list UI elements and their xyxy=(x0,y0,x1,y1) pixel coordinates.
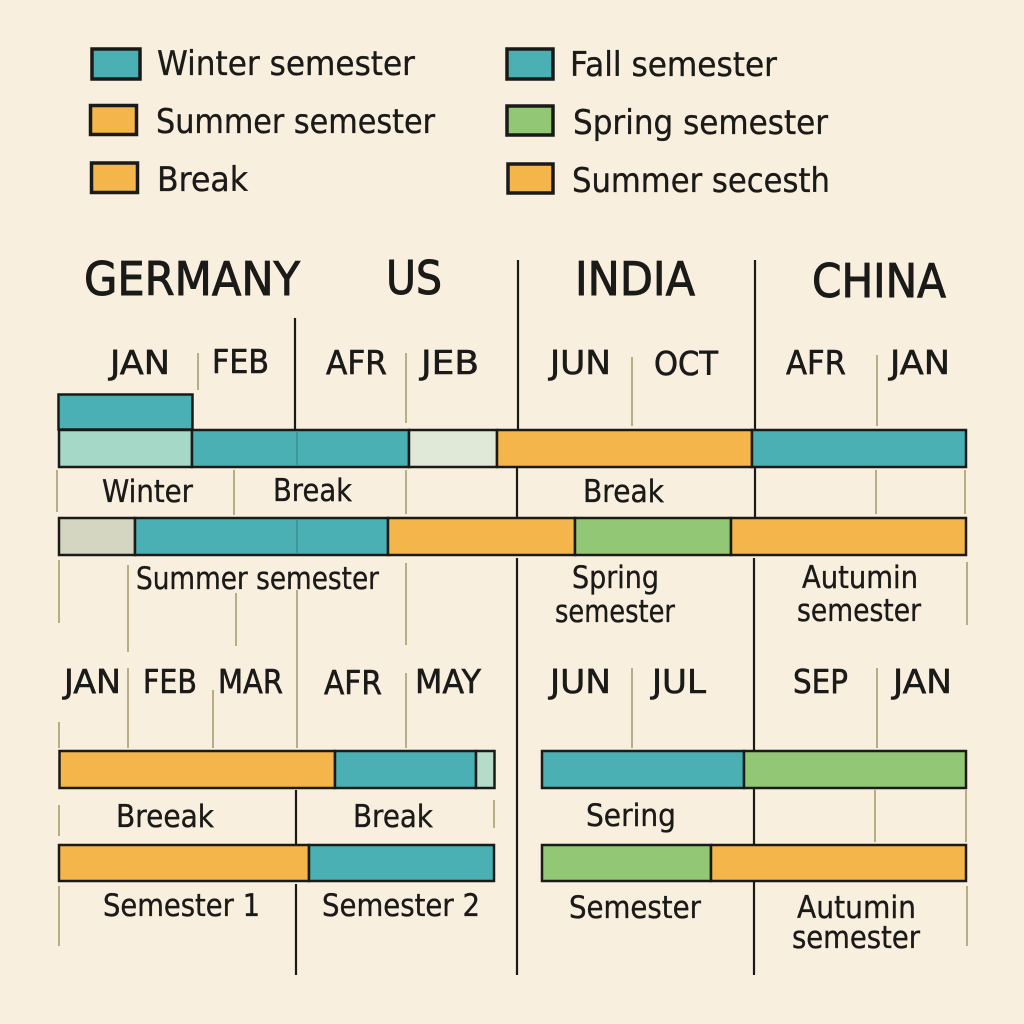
lower left bar 2 xyxy=(59,845,494,881)
legend: summer semester: Summer semester xyxy=(156,102,435,142)
lower month labels: FEB xyxy=(143,662,197,701)
lower month labels xyxy=(62,662,952,702)
upper month labels xyxy=(108,342,950,383)
upper month labels: AFR xyxy=(786,343,846,382)
upper row labels 2: Autumin xyxy=(802,560,918,596)
upper row labels 1 xyxy=(102,473,664,510)
upper month labels: JAN xyxy=(888,343,950,382)
lower row labels 1: Breeak xyxy=(116,799,214,835)
upper row labels 2 xyxy=(136,560,921,630)
lower month labels: JUL xyxy=(650,662,707,701)
upper timeline bar 1 xyxy=(59,430,966,467)
lower row labels 1: Sering xyxy=(586,798,676,834)
lower row labels 2: Semester xyxy=(569,890,701,926)
upper month labels: AFR xyxy=(326,343,387,382)
lower row labels 2: Semester 1 xyxy=(103,888,260,924)
lower month labels: JUN xyxy=(548,662,611,701)
lower month labels: SEP xyxy=(793,662,848,701)
lower month labels: JAN xyxy=(891,662,952,701)
upper row labels 2: semester xyxy=(797,593,921,629)
upper month labels: JEB xyxy=(419,343,479,382)
upper row labels 2: Spring xyxy=(572,560,659,596)
legend: break: Break xyxy=(157,160,248,200)
lower month labels: AFR xyxy=(324,663,382,702)
upper month labels: JUN xyxy=(548,343,611,382)
upper month labels: FEB xyxy=(212,342,269,381)
lower row labels 1: Break xyxy=(353,799,433,835)
lower row labels 2: semester xyxy=(792,920,920,956)
upper month labels: OCT xyxy=(654,344,719,383)
lower row labels 2: Autumin xyxy=(797,890,916,926)
grid lines xyxy=(57,260,967,975)
column headings: US xyxy=(386,251,442,305)
legend: summer secesth: Summer secesth xyxy=(572,161,830,201)
legend: winter semester: Winter semester xyxy=(157,44,415,84)
upper month labels: JAN xyxy=(108,343,170,382)
lower right bar 2 xyxy=(542,845,966,881)
lower row labels 1 xyxy=(116,798,676,835)
upper timeline bar 0 xyxy=(58,394,192,430)
upper row labels 2: semester xyxy=(555,594,675,630)
lower right bar 1 xyxy=(542,751,966,788)
column headings: INDIA xyxy=(575,252,695,306)
upper row labels 1: Break xyxy=(583,474,664,510)
lower left bar 1 xyxy=(60,751,494,788)
column headings xyxy=(84,251,946,308)
lower month labels: JAN xyxy=(62,662,121,701)
column headings: CHINA xyxy=(812,254,946,308)
upper row labels 2: Summer semester xyxy=(136,561,379,597)
legend xyxy=(90,44,830,201)
lower row labels 2 xyxy=(103,888,920,956)
lower month labels: MAR xyxy=(218,662,283,701)
upper row labels 1: Winter xyxy=(102,474,193,510)
lower row labels 2: Semester 2 xyxy=(322,888,480,924)
legend: break xyxy=(92,160,248,200)
legend: fall semester: Fall semester xyxy=(570,45,777,85)
upper row labels 1: Break xyxy=(273,473,352,509)
legend: spring semester: Spring semester xyxy=(573,103,828,143)
column headings: GERMANY xyxy=(84,252,301,306)
lower month labels: MAY xyxy=(415,662,482,701)
upper timeline bar 2 xyxy=(59,518,966,555)
